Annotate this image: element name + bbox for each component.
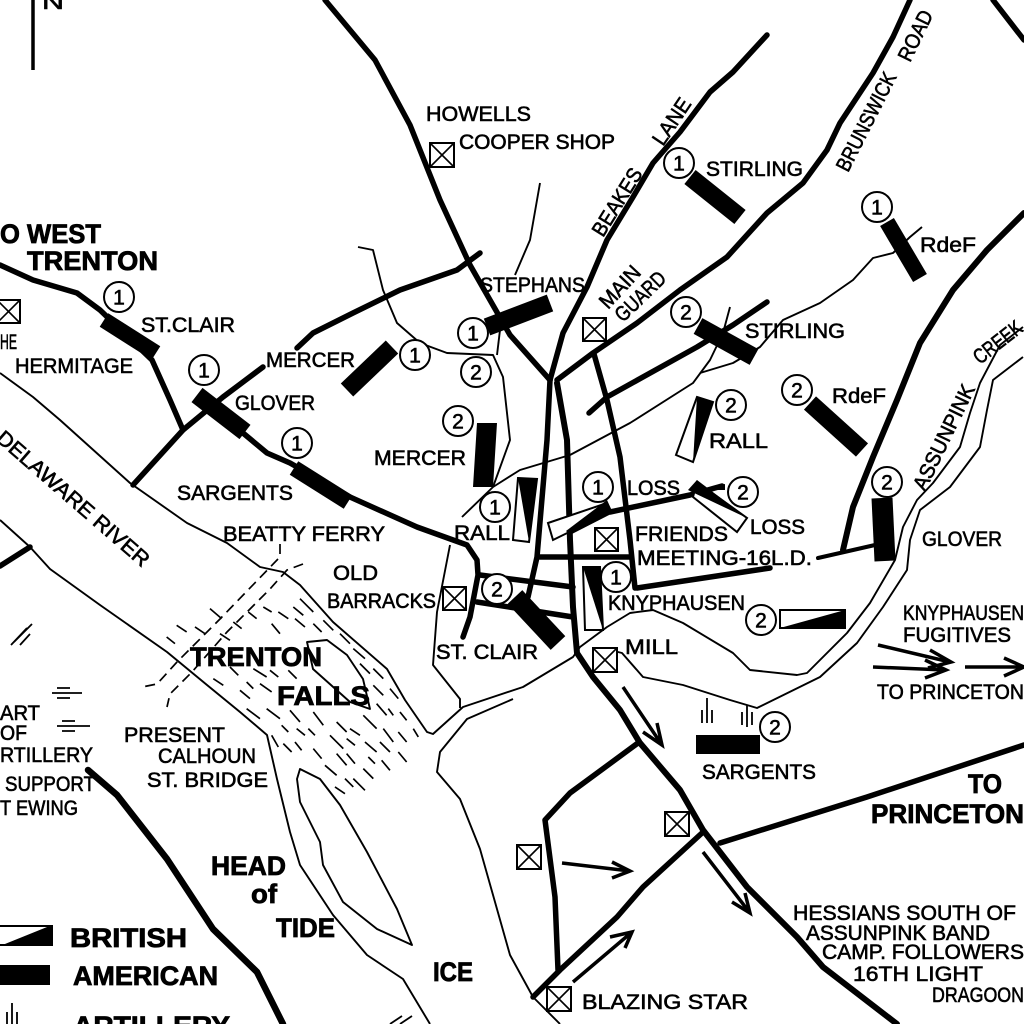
unit number circles: 2 xyxy=(680,302,692,324)
unit number circles: 2 xyxy=(725,394,737,418)
unit number circles: 1 xyxy=(113,286,125,310)
label: Present Calhoun St. Bridge xyxy=(124,724,268,792)
unit number circles: 2 xyxy=(791,380,803,402)
label: Main Guard: GUARD xyxy=(610,267,671,327)
label: St. Clair 1: ST.CLAIR xyxy=(141,314,235,337)
label: Beakes Lane: BEAKES xyxy=(588,164,648,241)
label: Assunpink Creek xyxy=(909,316,1024,494)
label: Part of artillery in support of Ewing: ART xyxy=(0,702,40,725)
label: Brunswick Road: BRUNSWICK xyxy=(832,69,901,175)
label: Stirling 2: STIRLING xyxy=(745,320,845,343)
label: Howells Cooper Shop: COOPER SHOP xyxy=(459,131,615,154)
label: Loss 2: LOSS xyxy=(750,516,805,539)
label: Main Guard: MAIN xyxy=(595,261,646,313)
unit number circles: 2 xyxy=(769,716,781,740)
unit number circles: 1 xyxy=(409,344,421,368)
label: Head of Tide: of xyxy=(251,879,278,909)
label: To West Trenton: O WEST xyxy=(0,219,101,249)
American troop bars xyxy=(104,177,920,754)
Beatty Ferry crossing dashes xyxy=(142,544,303,707)
label: The Hermitage: HERMITAGE xyxy=(15,355,133,378)
unit number circles: 1 xyxy=(673,152,685,176)
label: Glover 2: GLOVER xyxy=(922,528,1002,551)
label: RdeF 2: RdeF xyxy=(832,385,886,408)
label: Mill: MILL xyxy=(625,636,678,659)
unit number circles: 1 xyxy=(467,322,479,346)
label: Part of artillery in support of Ewing xyxy=(0,702,95,820)
British troop bars xyxy=(513,397,845,630)
label: Knyphausen Fugitives: FUGITIVES xyxy=(903,624,1011,647)
label: The Hermitage: HE xyxy=(0,331,17,354)
unit number circles: 2 xyxy=(452,410,464,434)
label: Rall 2: RALL xyxy=(709,430,768,453)
label: Hessians south of Assunpink band xyxy=(793,902,1024,1007)
label: Head of Tide: TIDE xyxy=(276,913,335,943)
label: Hessians south of Assunpink band: 16TH LIGHT xyxy=(853,963,983,986)
label: Hessians south of Assunpink band: ASSUNPINK BAND xyxy=(806,922,990,945)
unit number circles: 2 xyxy=(737,482,749,504)
label: Blazing Star Ferry: BLAZING STAR xyxy=(582,991,748,1014)
label: RdeF 1: RdeF xyxy=(920,234,976,257)
label: Mercer 1: MERCER xyxy=(266,349,355,372)
label: Present Calhoun St. Bridge: PRESENT xyxy=(124,724,225,747)
unit number circles xyxy=(104,148,902,742)
label: To West Trenton xyxy=(0,219,158,276)
unit number circles: 2 xyxy=(470,362,482,384)
label: Trenton Falls xyxy=(190,642,370,711)
label: Sargents 1: SARGENTS xyxy=(177,482,293,505)
label: Old Barracks xyxy=(327,562,436,613)
label: To Princeton large: TO xyxy=(968,769,1002,799)
unit number circles: 2 xyxy=(881,472,893,494)
legend xyxy=(0,923,230,1024)
label: Part of artillery in support of Ewing: RTILLERY xyxy=(0,744,93,767)
label: Head of Tide xyxy=(211,851,335,943)
label: Hessians south of Assunpink band: CAMP. FOLLOWERS xyxy=(822,941,1024,964)
label: Howells Cooper Shop: HOWELLS xyxy=(426,103,531,126)
label: Beatty Ferry: BEATTY FERRY xyxy=(223,523,385,546)
unit number circles: 1 xyxy=(871,196,883,220)
label: The Hermitage xyxy=(0,331,133,378)
label: St. Clair 2: ST. CLAIR xyxy=(436,641,538,664)
label: Trenton Falls: TRENTON xyxy=(190,642,322,672)
label: Old Barracks: BARRACKS xyxy=(327,590,436,613)
legend: BRITISH xyxy=(70,923,187,953)
label: Sargents 2: SARGENTS xyxy=(702,761,816,784)
label: Mercer 2: MERCER xyxy=(374,447,466,470)
label: To Princeton large xyxy=(871,769,1024,829)
unit number circles: 1 xyxy=(610,566,622,590)
label: Friends Meeting 16 L.D.: FRIENDS xyxy=(635,523,728,546)
label: Knyphausen Fugitives xyxy=(903,602,1024,647)
label: Howells Cooper Shop xyxy=(426,103,615,154)
label: Loss 1: LOSS xyxy=(627,477,680,500)
label: Present Calhoun St. Bridge: ST. BRIDGE xyxy=(147,769,268,792)
label: Beakes Lane: LANE xyxy=(648,94,696,150)
unit number circles: 1 xyxy=(291,432,303,456)
label: Friends Meeting 16 L.D. xyxy=(635,523,812,570)
unit number circles: 2 xyxy=(755,610,767,632)
label: Brunswick Road xyxy=(832,7,938,175)
legend: AMERICAN xyxy=(73,961,218,991)
label: Stephans: STEPHANS xyxy=(480,274,585,297)
label: Main Guard xyxy=(595,261,671,327)
label: Part of artillery in support of Ewing: T EWING xyxy=(0,797,78,820)
Trenton Falls rapids marks xyxy=(167,599,418,794)
unit number circles: 1 xyxy=(489,496,501,520)
movement arrows xyxy=(562,645,1024,982)
label: Beakes Lane xyxy=(588,94,696,241)
label: Hessians south of Assunpink band: HESSIANS SOUTH OF xyxy=(793,902,1016,925)
label: Present Calhoun St. Bridge: CALHOUN xyxy=(158,745,256,768)
label: Part of artillery in support of Ewing: SUPPORT xyxy=(5,773,95,796)
label: Rall 1: RALL xyxy=(454,522,510,545)
label: Friends Meeting 16 L.D.: MEETING-16L.D. xyxy=(637,547,812,570)
label: Blazing Star Ferry xyxy=(582,991,748,1024)
label: Knyphausen: KNYPHAUSEN xyxy=(608,592,745,615)
label: Assunpink Creek: ASSUNPINK xyxy=(909,381,980,494)
unit number circles: 1 xyxy=(198,360,210,382)
label: Part of artillery in support of Ewing: OF xyxy=(0,722,27,745)
label: Trenton Falls: FALLS xyxy=(277,681,370,711)
building markers xyxy=(0,143,689,1011)
label: Stirling 1: STIRLING xyxy=(706,158,803,181)
unit number circles: 2 xyxy=(491,578,503,602)
artillery symbols xyxy=(7,624,752,1024)
unit number circles: 1 xyxy=(592,476,604,500)
label: Brunswick Road: ROAD xyxy=(894,7,938,65)
label: To West Trenton: TRENTON xyxy=(27,246,158,276)
label: Glover 1: GLOVER xyxy=(235,392,315,415)
label: Head of Tide: HEAD xyxy=(211,851,286,881)
label: Ice: ICE xyxy=(433,957,473,987)
label: Old Barracks: OLD xyxy=(333,562,378,585)
